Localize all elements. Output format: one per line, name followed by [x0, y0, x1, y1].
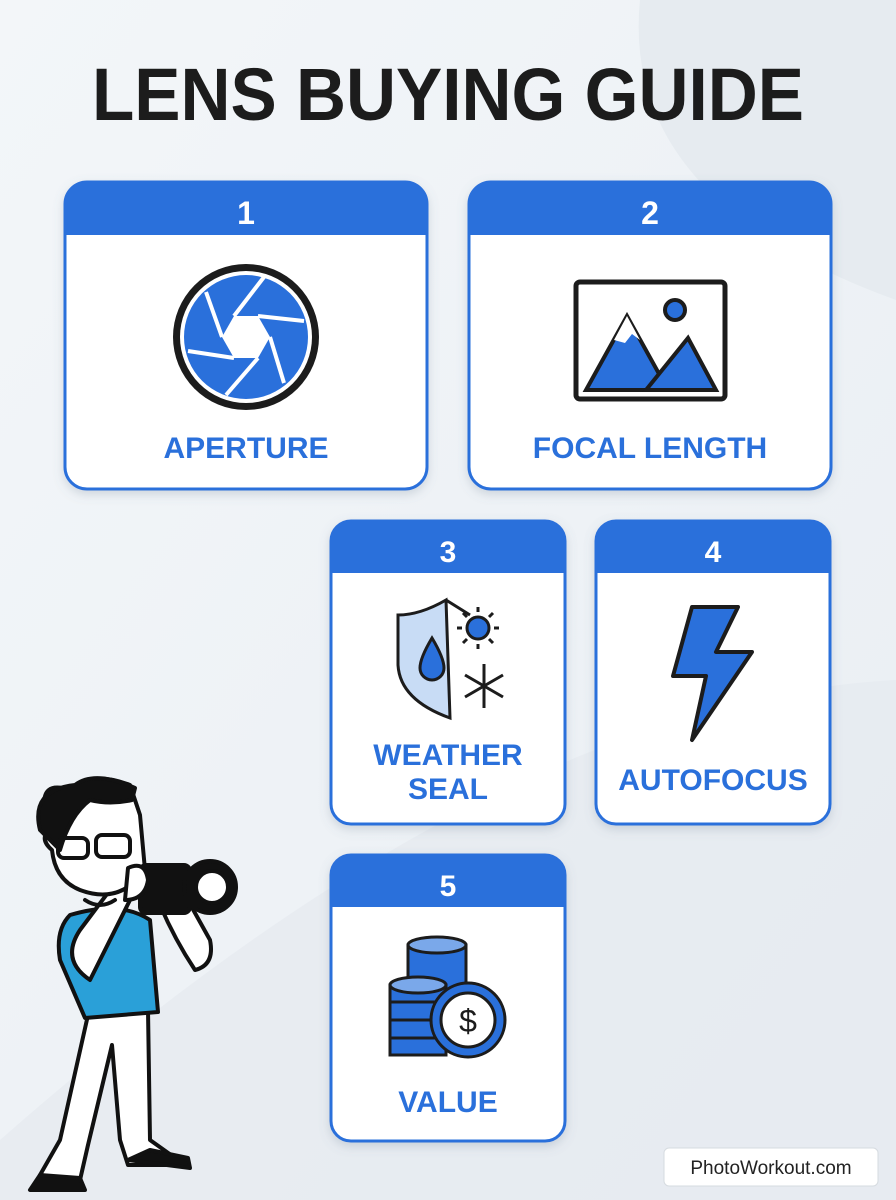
- icon: lightning bolt: [673, 607, 752, 740]
- label: value: VALUE: [398, 1086, 498, 1119]
- panel: weather seal: [331, 521, 565, 824]
- panel: weather seal: SEAL: [408, 773, 488, 806]
- panel: autofocus: [596, 521, 830, 824]
- watermark: PhotoWorkout.com: [690, 1158, 852, 1179]
- number 3: 3: [440, 536, 456, 569]
- number 4: 4: [705, 536, 722, 569]
- panel: aperture: [65, 182, 427, 489]
- panel: value: $: [459, 1003, 477, 1039]
- panel: value: [331, 855, 565, 1141]
- number 5: 5: [440, 870, 456, 903]
- label: aperture: APERTURE: [163, 432, 329, 465]
- icon: coins: [390, 937, 505, 1057]
- icon: shield with drop, sun, snowflake: [398, 600, 503, 718]
- label: weather seal: WEATHER: [373, 739, 523, 772]
- number 1: 1: [237, 195, 255, 231]
- illustration: photographer: [30, 778, 236, 1190]
- icon: aperture: [173, 264, 319, 410]
- label: focal length: FOCAL LENGTH: [533, 432, 767, 465]
- number 2: 2: [641, 195, 659, 231]
- watermark: [664, 1148, 878, 1186]
- icon: landscape picture: [576, 282, 725, 399]
- panel: focal length: [469, 182, 831, 489]
- title: LENS BUYING GUIDE: [92, 53, 804, 136]
- label: autofocus: AUTOFOCUS: [618, 764, 808, 797]
